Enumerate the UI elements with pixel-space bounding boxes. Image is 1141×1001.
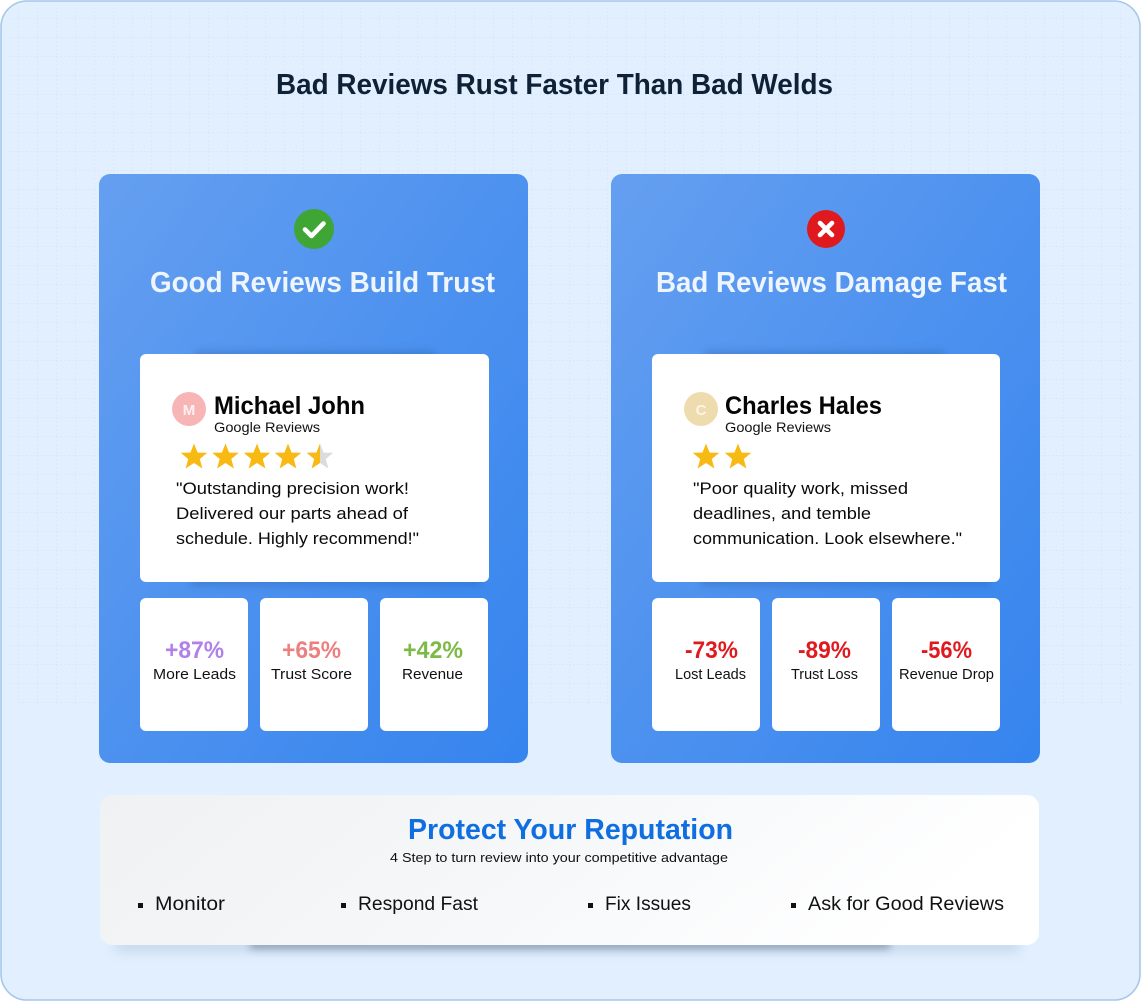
review quote: Delivered our parts ahead of [176,504,408,523]
review quote [693,479,962,548]
stat: trust loss: Trust Loss [791,666,858,683]
stat: lost leads: -73% [685,637,738,664]
stat: more leads [140,598,248,731]
stat: revenue: Revenue [402,666,463,683]
review quote: schedule. Highly recommend!" [176,529,419,548]
icon: red cross [807,210,845,248]
review card: Michael John [140,351,489,586]
review source: Google Reviews [725,419,831,435]
panel subtitle: 4 Step to turn review into your competitive advantage [390,850,728,865]
stat: trust score: +65% [282,637,341,664]
star rating: 2 [693,444,751,468]
review quote: deadlines, and temble [693,504,871,523]
avatar: C [684,392,718,426]
stat: more leads: More Leads [153,666,236,683]
reviewer name: Michael John [214,392,365,420]
avatar: M [172,392,206,426]
stat: revenue drop: -56% [921,637,972,664]
panel: protect your reputation [100,795,1039,952]
title: Bad Reviews Rust Faster Than Bad Welds [276,69,833,101]
heading: bad reviews: Bad Reviews Damage Fast [656,267,1007,299]
stat: trust score: Trust Score [271,666,352,683]
avatar: C: C [696,402,707,419]
review quote: communication. Look elsewhere." [693,529,962,548]
review quote: "Outstanding precision work! [176,479,409,498]
heading: good reviews: Good Reviews Build Trust [150,267,495,299]
panel heading: Protect Your Reputation [408,814,733,846]
review quote [176,479,419,548]
step: ask for good reviews: Ask for Good Reviews [808,894,1004,915]
panel: bad reviews [611,174,1040,763]
review source: Google Reviews [214,419,320,435]
stat: revenue drop [892,598,1000,731]
review card: Charles Hales [652,351,1000,586]
star rating: 4.5 [181,444,333,468]
review quote: "Poor quality work, missed [693,479,908,498]
stat: revenue [380,598,488,731]
panel: good reviews [99,174,528,763]
reviewer name: Charles Hales [725,392,882,420]
stat: revenue drop: Revenue Drop [899,666,994,683]
stat: lost leads [652,598,760,731]
stat: trust loss [772,598,880,731]
step: respond fast: Respond Fast [358,894,479,915]
step: fix issues: Fix Issues [605,894,691,915]
stat: lost leads: Lost Leads [675,666,746,683]
step: monitor: Monitor [155,894,226,915]
stat: more leads: +87% [165,637,224,664]
avatar: M: M [183,402,195,419]
stat: revenue: +42% [403,637,463,664]
stat: trust loss: -89% [798,637,851,664]
stat: trust score [260,598,368,731]
icon: green check [294,209,334,249]
